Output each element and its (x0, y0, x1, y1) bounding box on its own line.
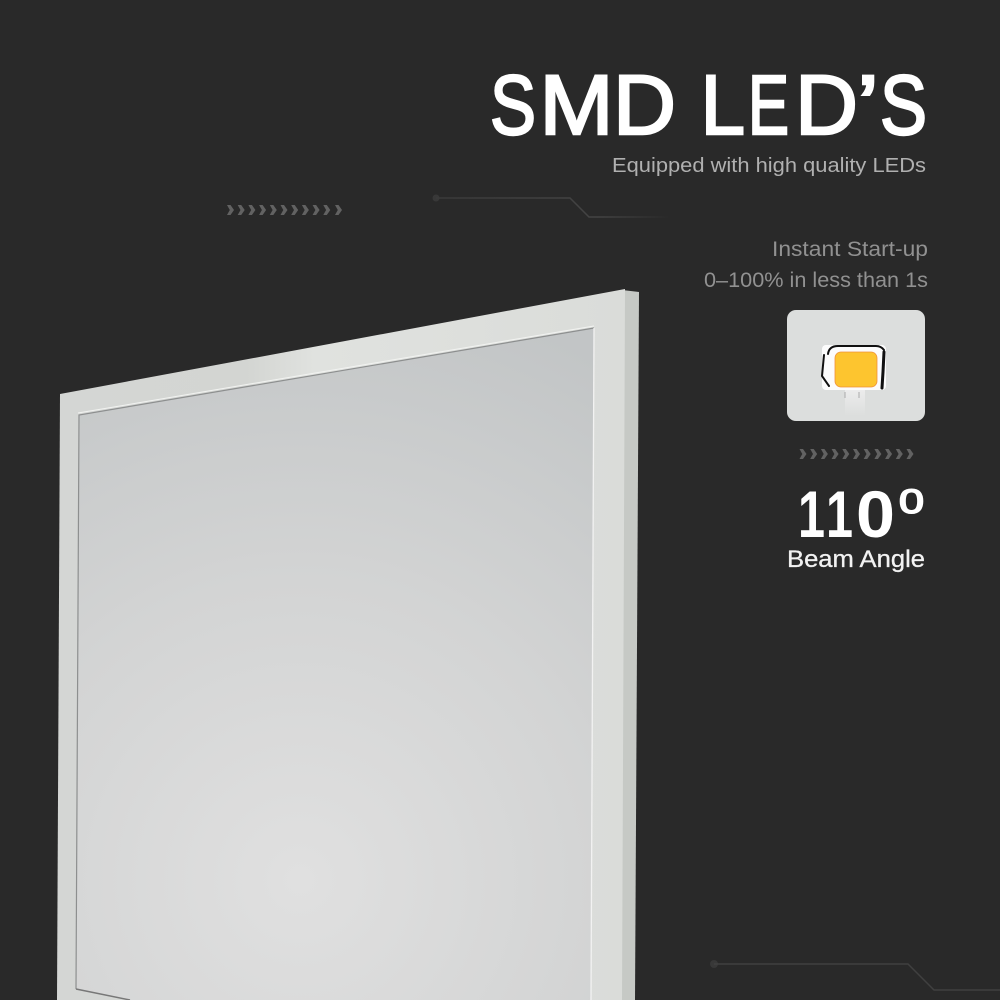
panel side edge (620, 290, 639, 1000)
chevron row lower (800, 449, 914, 459)
instant start-up text: Instant Start-up (772, 238, 928, 261)
instant start-up text: 0–100% in less than 1s (704, 269, 928, 292)
LED chip image (787, 310, 925, 421)
beam angle value: 0 (899, 483, 924, 521)
LED emitter (835, 352, 877, 387)
panel light product (57, 289, 639, 1000)
panel inner edges (76, 326, 594, 1000)
title: S (880, 58, 927, 152)
title: D (795, 58, 858, 152)
title: S (490, 58, 536, 152)
beam angle label: Beam Angle (787, 546, 925, 573)
beam angle value: 0 (856, 477, 895, 551)
instant start-up text (704, 238, 928, 292)
title: L (701, 58, 745, 152)
panel diffuser (76, 328, 594, 1000)
subtitle: Equipped with high quality LEDs (612, 155, 926, 177)
connector line top (432, 194, 668, 217)
beam angle value (798, 477, 924, 551)
title: D (613, 58, 676, 152)
panel frame (57, 289, 625, 1000)
connector line bottom (710, 960, 1000, 990)
title: ’ (857, 58, 879, 152)
title: M (540, 58, 614, 152)
beam angle value: 1 (826, 477, 853, 551)
beam angle value: 1 (798, 477, 825, 551)
chevron row top (227, 205, 342, 215)
title: E (748, 58, 789, 152)
